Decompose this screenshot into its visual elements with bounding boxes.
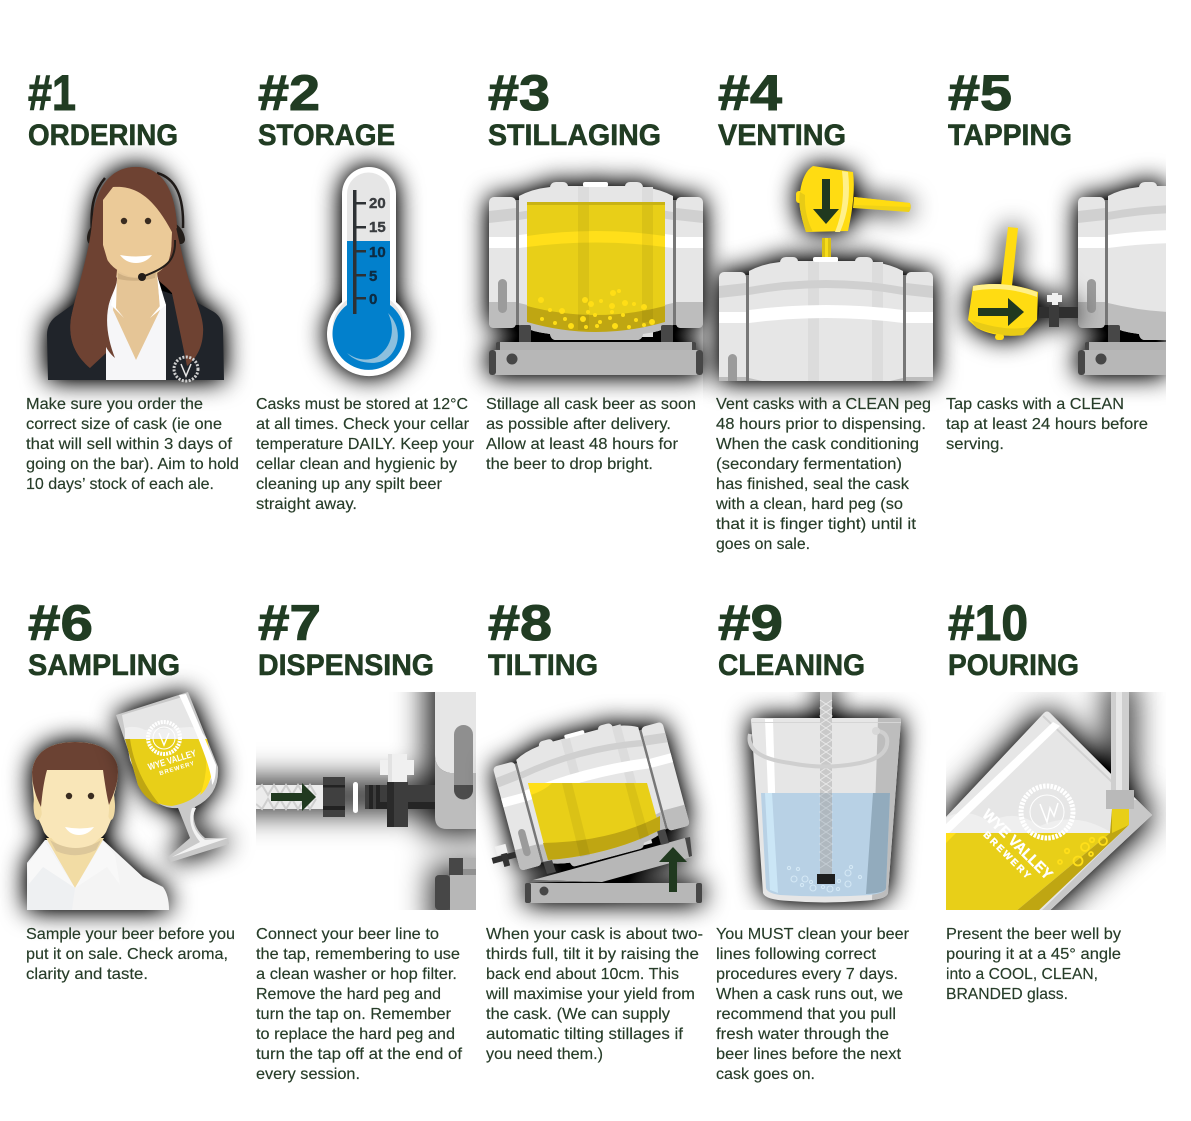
heading: stillaging: STILLAGING [488,119,661,152]
text: tilting: When your cask is about two- [486,926,703,943]
text: ordering: correct size of cask (ie one [26,416,222,433]
text: venting: (secondary fermentation) [716,456,902,473]
text: ordering: that will sell within 3 days of [26,436,233,453]
text: cleaning [716,926,909,1083]
text: pouring: Present the beer well by [946,926,1121,943]
text: ordering [26,396,239,493]
heading: #10: #10 [948,595,1028,651]
text: storage [256,396,474,513]
text: venting: that it is finger tight) until it [716,516,917,533]
text: cleaning: When a cask runs out, we [716,986,903,1003]
arrow: right [978,298,1024,326]
panel: step 6 sampling [26,595,235,983]
text: venting: with a clean, hard peg (so [715,496,903,513]
illustration: woman with headset [47,167,224,381]
text: cleaning: cask goes on. [716,1066,815,1083]
hair [32,742,118,807]
text: cleaning: lines following correct [716,946,877,963]
scale labels: 0 [369,291,377,308]
text: storage: cleaning up any spilt beer [256,476,442,493]
illustration: mallet driving tap into cask [968,182,1191,375]
text: ordering: 10 days’ stock of each ale. [26,476,214,493]
heading: #8: #8 [488,595,552,651]
text: cleaning: procedures every 7 days. [716,966,898,983]
panel: step 4 venting [715,65,933,553]
text: storage: straight away. [256,496,357,513]
text: pouring [946,926,1121,1003]
heading: #4: #4 [718,65,782,121]
illustration: cask on stillage with beer [489,182,703,375]
scale labels: 15 [369,219,386,236]
heading: #7: #7 [258,595,321,651]
heading: dispensing: DISPENSING [258,649,434,682]
text: sampling: clarity and taste. [26,966,148,983]
bubbles [538,289,655,329]
panel: step 7 dispensing [256,604,476,1083]
illustration: thermometer [327,167,411,376]
panel: step 3 stillaging [486,65,703,473]
glass lettering: BREWERY [981,830,1033,882]
heading: #5: #5 [948,65,1012,121]
heading: tapping: TAPPING [948,119,1072,152]
text: venting [715,396,931,553]
text: tapping: tap at least 24 hours before [946,416,1148,433]
text: dispensing: to replace the hard peg and [256,1026,455,1043]
heading: venting: VENTING [718,119,846,152]
illustration: tap and beer line [256,692,476,910]
heading: cleaning: CLEANING [718,649,865,682]
illustration: man [27,742,169,910]
panel: step 8 tilting [485,595,703,1063]
text: dispensing: turn the tap on. Remember [256,1006,451,1023]
text: venting: When the cask conditioning [716,436,919,453]
text: tilting [485,926,703,1063]
text: cleaning: recommend that you pull [716,1006,896,1023]
arrow: down [813,179,839,224]
text: pouring: BRANDED glass. [946,986,1068,1003]
glass lettering: WYE VALLEY [979,806,1056,883]
heading: sampling: SAMPLING [28,649,180,682]
heading: #1: #1 [28,65,76,121]
heading: #2: #2 [258,65,320,121]
illustration: pouring into tilted glass [946,692,1166,910]
text: tapping [946,396,1148,453]
text: dispensing: every session. [256,1066,360,1083]
illustration: bucket with beer line [750,680,901,902]
text: sampling: put it on sale. Check aroma, [26,946,228,963]
text: tilting: you need them.) [486,1046,603,1063]
heading: storage: STORAGE [258,119,395,152]
text: ordering: Make sure you order the [26,396,203,413]
logo roundel [1021,786,1073,838]
heading: tilting: TILTING [488,649,598,682]
text: stillaging: Allow at least 48 hours for [486,436,678,453]
panel: step 9 cleaning [716,595,909,1083]
arrow: right [271,783,316,811]
panel: step 10 pouring [940,595,1170,1003]
bubbles [1058,837,1107,866]
heading: #9: #9 [718,595,783,651]
scale labels [369,195,386,308]
text: ordering: going on the bar). Aim to hold [26,456,239,473]
text: tilting: back end about 10cm. This [486,966,679,983]
tap [489,842,518,870]
illustration: tilted cask on stillage [489,710,702,903]
text: stillaging: the beer to drop bright. [486,456,653,473]
text: dispensing: a clean washer or hop filter. [256,966,457,983]
text: dispensing: Remove the hard peg and [256,986,441,1003]
text: venting: 48 hours prior to dispensing. [716,416,926,433]
glass lettering: BREWERY [159,761,195,777]
text: venting: Vent casks with a CLEAN peg [716,396,931,413]
text: dispensing: Connect your beer line to [256,926,439,943]
text: venting: goes on sale. [716,536,810,553]
text: dispensing: the tap, remembering to use [256,946,460,963]
text: storage: Casks must be stored at 12°C [256,396,468,413]
text: tilting: thirds full, tilt it by raising the [486,946,699,963]
text: tilting: will maximise your yield from [485,986,695,1003]
text: storage: at all times. Check your cellar [256,416,469,433]
beer in cask [528,783,660,860]
text: dispensing: turn the tap off at the end of [256,1046,463,1063]
text: pouring: pouring it at a 45° angle [946,946,1121,963]
text: sampling [26,926,235,983]
text: tapping: Tap casks with a CLEAN [946,396,1124,413]
text: tilting: the cask. (We can supply [486,1006,670,1023]
illustration: glass of beer [116,692,229,862]
heading: ordering: ORDERING [28,119,178,152]
text: stillaging [486,396,696,473]
text: pouring: into a COOL, CLEAN, [946,966,1098,983]
panel: step 2 storage [256,65,474,513]
text: storage: cellar clean and hygienic by [256,456,457,473]
text: dispensing [256,926,463,1083]
panel: step 5 tapping [946,75,1166,453]
glass lettering [147,748,200,780]
text: cleaning: beer lines before the next [716,1046,902,1063]
hair [70,167,177,368]
bubbles [787,865,862,892]
scale labels: 20 [369,195,386,212]
text: sampling: Sample your beer before you [26,926,235,943]
panel: step 1 ordering [26,65,239,493]
arrow: up [659,847,687,892]
glass lettering: WYE VALLEY [147,748,198,773]
logo roundel [148,722,180,754]
heading: #6: #6 [28,595,93,651]
text: cleaning: fresh water through the [716,1026,889,1043]
text: cleaning: You MUST clean your beer [716,926,909,943]
text: stillaging: as possible after delivery. [486,416,671,433]
text: tapping: serving. [946,436,1004,453]
text: venting: has finished, seal the cask [716,476,909,493]
text: stillaging: Stillage all cask beer as soon [486,396,696,413]
heading: #3: #3 [488,65,550,121]
illustration: cask and mallet with peg [719,166,933,415]
scale labels: 10 [369,244,386,261]
text: storage: temperature DAILY. Keep your [256,436,474,453]
heading: pouring: POURING [948,649,1079,682]
text: tilting: automatic tilting stillages if [486,1026,684,1043]
scale labels: 5 [369,268,377,285]
